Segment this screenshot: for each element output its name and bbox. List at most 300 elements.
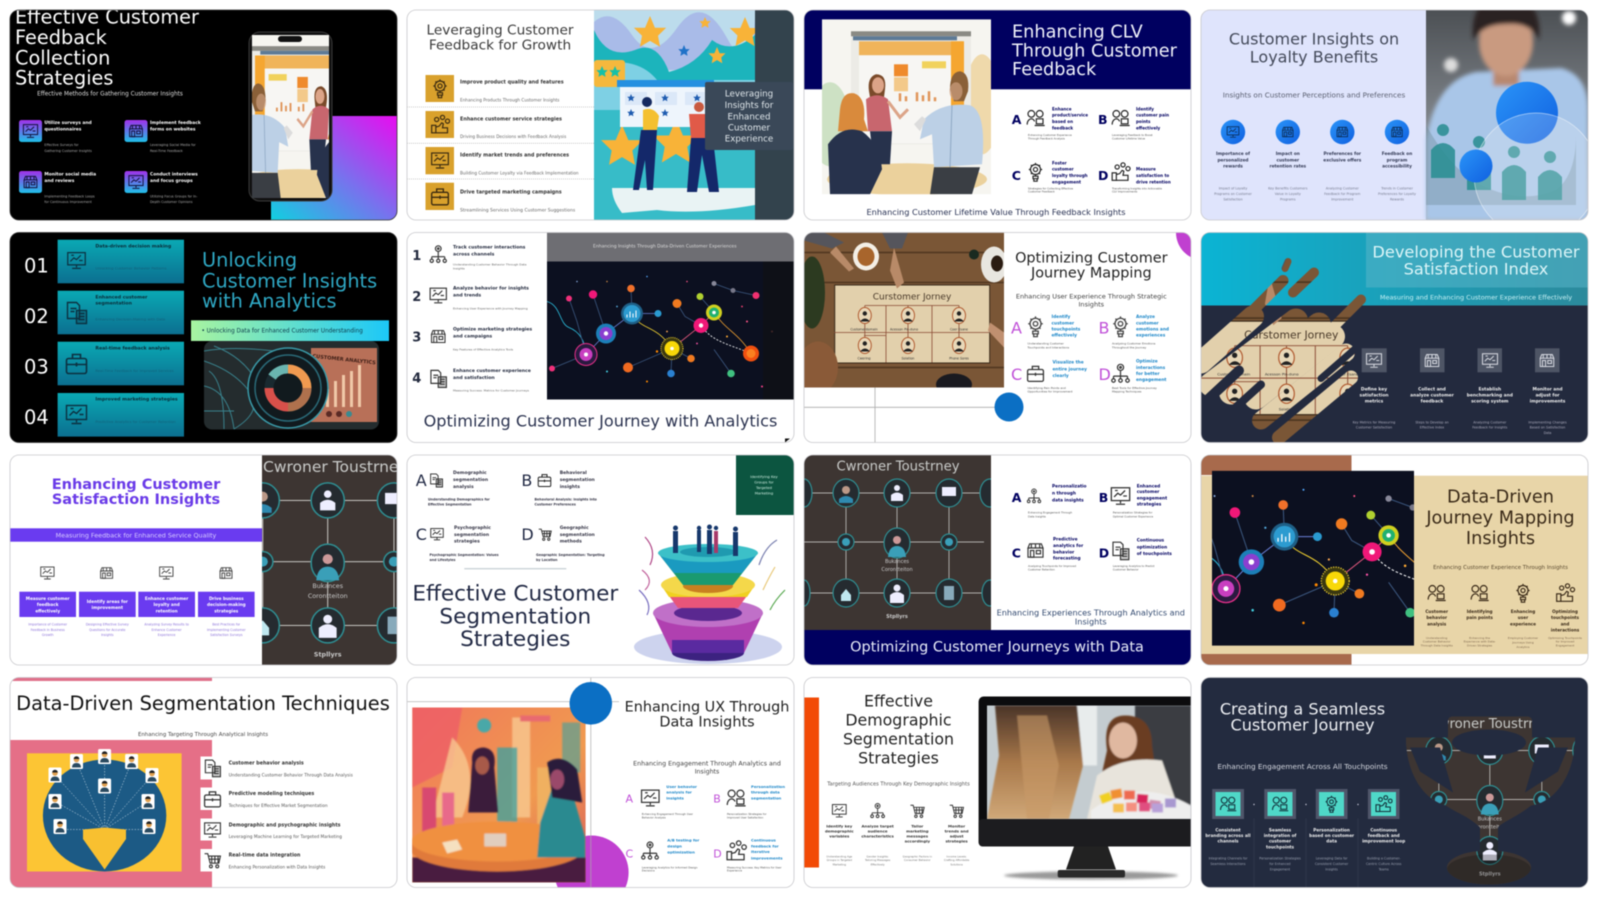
item B: effectively <box>1136 125 1161 130</box>
item A: A <box>1012 490 1022 505</box>
item: feedback forms: forms on websites <box>150 126 196 132</box>
slide 12: data-driven journey mapping <box>1176 455 1588 665</box>
title: Strategies <box>460 627 570 652</box>
item B: B <box>1098 112 1108 127</box>
item C: C <box>416 525 427 544</box>
step 02: 02 <box>24 305 49 328</box>
item: marketing campaigns: Drive targeted marketing campaigns <box>460 190 562 196</box>
item A: insights <box>666 796 684 801</box>
item: messages <box>903 805 932 862</box>
item A: Enhancing Engagement Through User <box>642 812 694 816</box>
item: predictive modeling: Predictive modeling techniques <box>229 791 314 797</box>
title: Unlocking <box>202 249 297 272</box>
metric: define: metrics <box>1365 399 1384 405</box>
item: product quality: Enhancing Products Through Customer Insights <box>460 97 559 102</box>
item D: Experience <box>727 869 742 873</box>
item: personalization: Consistent Customer <box>1315 862 1349 866</box>
title: Effective Customer <box>15 6 199 28</box>
item: real-time integration: Enhancing Personalization with Data Insights <box>229 864 326 870</box>
item: interviews <box>124 171 198 204</box>
item D: D <box>1098 168 1108 183</box>
item A <box>1012 483 1087 519</box>
item: trends: Monitor <box>948 824 965 829</box>
item C: Psychographic Segmentation: Values <box>430 553 499 557</box>
corner circle <box>1176 204 1232 260</box>
title: Segmentation <box>439 604 591 629</box>
pink panel <box>10 740 212 888</box>
metric: monitor: improvements <box>1530 399 1566 405</box>
item: touchpoints: Optimizing Touchpoints <box>1548 636 1582 640</box>
step 02: Enhanced customer <box>95 294 148 300</box>
card: loyalty: Analyzing Survey Results to <box>144 623 189 627</box>
item B: strategies <box>1137 501 1162 507</box>
item A: segmentation <box>453 477 488 483</box>
item: personalized rewards: Programs on Customer <box>1214 192 1253 196</box>
step 02 <box>24 291 184 334</box>
item C: Analyzing Touchpoints for Improved <box>1028 564 1076 568</box>
pink strip <box>10 678 212 681</box>
metric: monitor: Implementing Changes <box>1528 421 1567 425</box>
green callout: Groups for <box>754 480 774 484</box>
item A: touchpoints <box>1052 326 1081 332</box>
green callout <box>736 455 794 515</box>
item D: Measure <box>1136 167 1156 172</box>
item: integration: Engagement <box>1270 868 1291 872</box>
item C: Strategies for Collecting Effective <box>1028 186 1073 190</box>
slide 6: optimizing journey with analytics <box>407 232 794 442</box>
title: Journey Mapping <box>1030 265 1152 281</box>
item B <box>1098 107 1169 140</box>
item D: CLV Improvements <box>1112 190 1138 194</box>
item B: Throughout the Journey <box>1111 346 1147 350</box>
item: social media <box>19 171 96 204</box>
phone mockup <box>248 31 334 202</box>
card: measure: effectively <box>35 608 60 613</box>
grid lines <box>804 388 1004 442</box>
journey board image <box>794 455 1000 630</box>
item: accessibility: Feedback on <box>1382 151 1412 157</box>
item C: engagement <box>1052 179 1081 184</box>
callout box: Insights for <box>725 101 774 111</box>
journey board image: Cwroner Toustrney <box>263 458 408 476</box>
item: social media: Monitor social media <box>44 172 96 178</box>
item A <box>416 470 490 507</box>
item B: points <box>1136 119 1151 124</box>
item C: analytics for <box>1053 543 1084 549</box>
item: feedback loop <box>1362 789 1405 872</box>
item A: A <box>626 792 634 805</box>
item D: D <box>1098 365 1111 384</box>
item A: n through <box>1052 491 1076 497</box>
subtitle: Enhancing Experiences Through Analytics and <box>997 608 1185 618</box>
item B: Customer Preferences <box>534 503 576 507</box>
item: behavior analysis: Customer <box>1425 609 1449 614</box>
metric: define: Key Metrics for Measuring <box>1353 421 1395 425</box>
item B: Behavioral <box>560 470 587 476</box>
subtitle: Enhancing Customer Experience Through Insights <box>1433 565 1568 571</box>
step 03: 03 <box>24 355 49 378</box>
item: characteristics: audience <box>868 829 888 834</box>
item C: Leveraging Analytics for Informed Design <box>642 866 698 870</box>
item: personalized rewards: personalized <box>1217 157 1249 163</box>
item: user experience: Employing Customer <box>1508 636 1539 640</box>
green callout: Targeted <box>755 486 772 490</box>
glass circle <box>1474 112 1588 220</box>
blue circle large <box>1496 82 1558 144</box>
item A: customer <box>1052 320 1075 326</box>
item B: Leveraging Feedback to Boost <box>1112 133 1153 137</box>
item: behavior analysis: Understanding <box>1426 636 1448 640</box>
item: exclusive offers: exclusive offers <box>1323 157 1362 163</box>
card: decisions: Satisfaction Surveys <box>210 633 243 637</box>
item: touchpoints <box>1548 584 1582 648</box>
metric: collect <box>1410 348 1455 430</box>
sketched people circle <box>1426 124 1576 205</box>
item: integration: touchpoints <box>1266 844 1295 849</box>
orange bar <box>804 698 819 868</box>
item: interviews: Utilizing Focus Groups for In- <box>150 194 198 198</box>
slide 13: segmentation techniques <box>10 678 397 888</box>
item: variables: variables <box>829 834 850 839</box>
item: personalized rewards: Importance of <box>1216 151 1250 157</box>
item A: feedback <box>1052 125 1073 130</box>
step 1: Insights <box>453 267 465 271</box>
card: measure: Importance of Customer <box>28 623 68 627</box>
item: retention rates: Programs <box>1280 198 1296 202</box>
item: surveys: Gathering Customer Insights <box>44 149 92 153</box>
card: identify: Insights <box>101 633 114 637</box>
title: with Analytics <box>202 289 337 312</box>
subtitle: Enhancing Targeting Through Analytical Insights <box>138 732 268 738</box>
item D: Continuous <box>751 838 776 843</box>
step 04: Improved marketing strategies <box>95 397 178 403</box>
footer caption: Enhancing Customer Lifetime Value Through Feedback Insights <box>866 207 1126 217</box>
item D: D <box>1099 545 1109 560</box>
item: service strategies: Enhance customer service strategies <box>460 116 562 122</box>
subtitle: Insights <box>1075 617 1107 627</box>
item: retention rates: customer <box>1276 157 1300 163</box>
step 1: Understanding Customer Behavior Through Data <box>453 263 527 267</box>
journey board image <box>197 453 459 672</box>
item: social media: Implementing Feedback Loops <box>44 194 95 198</box>
item: pain points: Experience with Data- <box>1464 640 1496 644</box>
item: trends: Crafting Affordable <box>944 858 970 862</box>
item: demographic insights: Leveraging Machine Learning for Targeted Marketing <box>229 834 342 840</box>
title: Feedback <box>1012 60 1097 80</box>
card: decisions: strategies <box>214 608 239 613</box>
item: branding: Integrating Channels for <box>1209 856 1248 860</box>
step 2 <box>412 286 529 310</box>
item: behavior analysis <box>200 756 354 780</box>
item D: optimization <box>1137 544 1167 550</box>
item: product quality <box>426 75 564 102</box>
divider <box>464 568 566 569</box>
metric: collect: Collect and <box>1418 386 1446 392</box>
guide lines <box>407 678 619 888</box>
title: Data Insights <box>659 715 755 731</box>
card: decisions: Best Practices for <box>212 623 241 627</box>
item: surveys: questionnaires <box>44 126 82 132</box>
item C: optimization <box>667 850 695 855</box>
card: measure <box>19 567 76 637</box>
item C: Decisions <box>642 869 655 873</box>
item: personalized rewards: Satisfaction <box>1223 198 1243 202</box>
item: integration: integration of <box>1264 833 1296 838</box>
title: Satisfaction Insights <box>52 492 220 508</box>
item: branding: Seamless Interactions <box>1210 862 1246 866</box>
item B: Optimal Customer Experience <box>1113 515 1154 519</box>
trophy-shaped journey image <box>1387 712 1593 888</box>
item: feedback loop: Continuous <box>1370 827 1398 832</box>
metric: benchmark: Establish <box>1479 386 1501 392</box>
item A: Effective Segmentation <box>428 503 472 507</box>
illustration: reviewers and stars <box>594 10 760 220</box>
item B: Enhanced <box>1137 483 1160 489</box>
item: pain points: Enhancing the <box>1469 636 1490 640</box>
brown blocks <box>1201 455 1352 665</box>
item A: Touchpoints and Interactions <box>1026 346 1070 350</box>
card: decisions: Drive business <box>209 596 244 601</box>
title: Feedback <box>15 26 108 49</box>
item: touchpoints: Optimizing <box>1552 609 1578 614</box>
slide 9: satisfaction insights <box>10 453 459 672</box>
item: market trends: Identify market trends and preferences <box>460 153 569 159</box>
item C: design <box>667 843 682 848</box>
item D: satisfaction to <box>1136 173 1169 178</box>
green callout: Marketing <box>755 492 773 496</box>
item B: engagement <box>1137 495 1167 501</box>
item D: iterative <box>751 849 770 854</box>
item A: A <box>1011 318 1022 337</box>
item C <box>1011 360 1087 394</box>
item: variables <box>825 805 854 866</box>
metric: monitor: adjust for <box>1535 392 1560 398</box>
item: integration: Personalization Strategies <box>1259 856 1301 860</box>
item: service strategies <box>426 111 566 139</box>
step 1: Track customer interactions <box>453 245 526 251</box>
item A: Personalizatio <box>1052 483 1087 489</box>
item D: Customer Behavior <box>1113 568 1140 572</box>
item: marketing campaigns <box>426 183 576 214</box>
item: variables: Understanding Age <box>826 854 853 858</box>
item B: customer <box>1137 489 1160 495</box>
item: messages: Geographic Factors in <box>903 854 932 858</box>
item: user experience: user <box>1518 615 1529 620</box>
slide 7: journey mapping <box>798 204 1232 442</box>
item C: A/B testing for <box>667 838 699 843</box>
slide 3: enhancing CLV <box>804 10 1191 220</box>
item B: Personalization Strategies for <box>727 812 767 816</box>
item A: Identify <box>1052 314 1071 320</box>
item A: Enhancing Customer Experience <box>1028 133 1072 137</box>
card: loyalty: Enhance customer <box>145 596 189 601</box>
item: feedback loop: Centric Culture Across <box>1366 862 1402 866</box>
title panel: Satisfaction Index <box>1404 259 1549 278</box>
item: messages: marketing <box>906 829 929 834</box>
item C: Visualize the <box>1052 360 1084 366</box>
watercolor meeting image <box>821 18 992 195</box>
item: predictive modeling: Techniques for Effective Market Segmentation <box>228 803 328 809</box>
callout box <box>705 82 793 150</box>
item B: insights <box>560 484 580 490</box>
item B: customer pain <box>1136 113 1169 118</box>
metric: collect: Steps to Develop an <box>1415 421 1449 425</box>
item A: effectively <box>1052 332 1077 338</box>
item D: improvements <box>751 855 783 860</box>
item: real-time integration <box>200 849 326 872</box>
data network image <box>1211 470 1415 646</box>
item: behavior analysis: Understanding Customer Behavior Through Data Analysis <box>229 772 354 778</box>
item: exclusive offers: Feedback for Program <box>1324 192 1360 196</box>
step 01 <box>24 240 184 283</box>
item C: entire journey <box>1052 366 1087 372</box>
item: trends: Income Levels: <box>947 854 967 858</box>
subtitle: Measuring and Enhancing Customer Experience Effectively <box>1380 293 1572 301</box>
item C: Predictive <box>1053 537 1078 543</box>
item C <box>1012 537 1084 572</box>
subtitle band <box>10 528 262 542</box>
item: branding: branding across all <box>1205 833 1251 838</box>
item B <box>521 470 598 507</box>
metric: collect: Effective Index <box>1420 426 1444 430</box>
item C: clearly <box>1052 373 1069 379</box>
item D: Continuous <box>1137 537 1165 543</box>
item D <box>1098 163 1171 194</box>
dark right column <box>755 10 794 220</box>
item D <box>713 838 783 873</box>
item B: Behavioral Analysis: Insights into <box>534 498 598 502</box>
item: trends: trends and <box>945 829 969 834</box>
slide 1: feedback collection strategies <box>10 6 397 220</box>
item: accessibility: accessibility <box>1382 164 1412 170</box>
step 04: Predictive Analytics for Customer Retention <box>95 420 176 424</box>
step 01: Data-driven decision making <box>95 244 171 250</box>
item B: Identify <box>1136 107 1154 112</box>
item A: A <box>416 471 427 490</box>
item: predictive modeling <box>200 788 328 810</box>
card: identify: Designing Effective Survey <box>86 623 129 627</box>
item B: emotions and <box>1136 326 1169 332</box>
item: messages: Tailor <box>911 824 923 829</box>
item A: Data Insights <box>1028 515 1046 519</box>
item: variables: Marketing <box>833 862 846 866</box>
metric: benchmark: benchmarking and <box>1467 392 1513 398</box>
title: Customer Insights on <box>1229 29 1399 48</box>
item C <box>626 838 699 873</box>
item: real-time integration: Real-time data integration <box>229 852 301 858</box>
item: integration: Seamless <box>1269 827 1292 832</box>
teal top band <box>1201 232 1588 306</box>
item C: strategies <box>454 539 480 545</box>
step 3: Optimize marketing strategies <box>453 326 532 332</box>
step 2: and trends <box>453 293 481 299</box>
step 3: and campaigns <box>453 334 492 340</box>
item: interviews: and focus groups <box>150 178 193 184</box>
step 2: Enhancing User Experience with Journey Mapping <box>453 306 528 310</box>
item: feedback forms <box>124 120 201 153</box>
item A: Understanding Customer <box>1028 342 1065 346</box>
step 02: Enhancing Decision-Making with Data <box>95 318 165 322</box>
item: branding <box>1205 789 1251 866</box>
item B: Analyze <box>1136 314 1155 320</box>
subtitle: Enhancing Engagement Across All Touchpoints <box>1217 762 1388 771</box>
step 4: Enhance customer experience <box>453 368 531 374</box>
title: Segmentation <box>843 729 954 748</box>
data network image <box>547 262 794 400</box>
item C: C <box>1012 545 1021 560</box>
step 04: 04 <box>24 406 49 429</box>
item C: Psychographic <box>454 525 491 531</box>
subtitle: Targeting Audiences Through Key Demographic Insights <box>826 782 970 788</box>
item B: B <box>1099 490 1108 505</box>
item A: analysis for <box>666 790 692 795</box>
item B: Improved User Satisfaction <box>727 815 764 819</box>
item: feedback loop: Building a Customer- <box>1367 856 1400 860</box>
item: retention rates: retention rates <box>1269 164 1307 170</box>
card: identify: Identify areas for <box>87 599 129 604</box>
item: market trends: Building Customer Loyalty via Feedback Implementation <box>460 170 579 175</box>
step 04 <box>24 393 184 437</box>
step 01: 01 <box>24 254 49 277</box>
item A: Through Feedback Analysis <box>1027 136 1065 140</box>
grey header band: Enhancing Insights Through Data-Driven Customer Experiences <box>593 244 737 250</box>
subtitle: Effective Methods for Gathering Customer Insights <box>37 92 183 98</box>
item: branding: channels <box>1217 839 1239 844</box>
item D: Optimize <box>1136 359 1158 365</box>
metric: collect: feedback <box>1421 399 1443 405</box>
card: identify: improvement <box>92 605 123 610</box>
item A <box>1011 314 1081 350</box>
item: characteristics: Effectively <box>871 862 885 866</box>
item: accessibility: program <box>1387 157 1408 163</box>
item: behavior analysis: analysis <box>1427 621 1447 626</box>
item: personalized rewards: rewards <box>1223 164 1243 170</box>
item: characteristics: characteristics <box>861 834 894 839</box>
journey board image: Cwroner Toustrney <box>836 460 960 474</box>
subtitle: Insights on Customer Perceptions and Preferences <box>1223 91 1405 100</box>
callout box: Experience <box>725 135 773 145</box>
card: measure: Feedback in Business <box>31 628 65 632</box>
title: Strategies <box>15 67 113 90</box>
item A: Demographic <box>453 470 487 476</box>
item A: A <box>1012 112 1022 127</box>
item A: Enhancing Engagement Through <box>1028 511 1072 515</box>
callout box: Enhanced <box>728 112 770 122</box>
item: feedback loop: Teams <box>1378 868 1389 872</box>
card: loyalty: retention <box>156 608 178 613</box>
item B <box>1099 483 1167 519</box>
trophy-shaped journey image: Cwroner Toustrney <box>1429 717 1553 732</box>
item: behavior analysis <box>1420 586 1453 648</box>
title panel: Developing the Customer <box>1372 242 1580 261</box>
item: feedback forms: Leveraging Social Media for <box>150 143 196 147</box>
item B: segmentation <box>560 477 595 483</box>
item: accessibility <box>1378 120 1416 202</box>
card: decisions: Implementing Customer <box>207 628 246 632</box>
item D: by Location <box>536 558 558 562</box>
item: pain points: Driven Strategies <box>1467 644 1493 648</box>
item B: experiences <box>1136 332 1166 338</box>
step 4 <box>412 368 531 392</box>
item D: segmentation <box>560 532 595 538</box>
item C: customer <box>1052 167 1074 172</box>
item C: Foster <box>1052 160 1067 165</box>
item: behavior analysis: behavior <box>1426 615 1448 620</box>
item: characteristics: Tailoring Messages <box>864 858 891 862</box>
item A: Understanding Demographics for <box>428 498 490 502</box>
item: demographic insights: Demographic and psychographic insights <box>229 822 341 828</box>
title: Feedback for Growth <box>429 37 571 53</box>
